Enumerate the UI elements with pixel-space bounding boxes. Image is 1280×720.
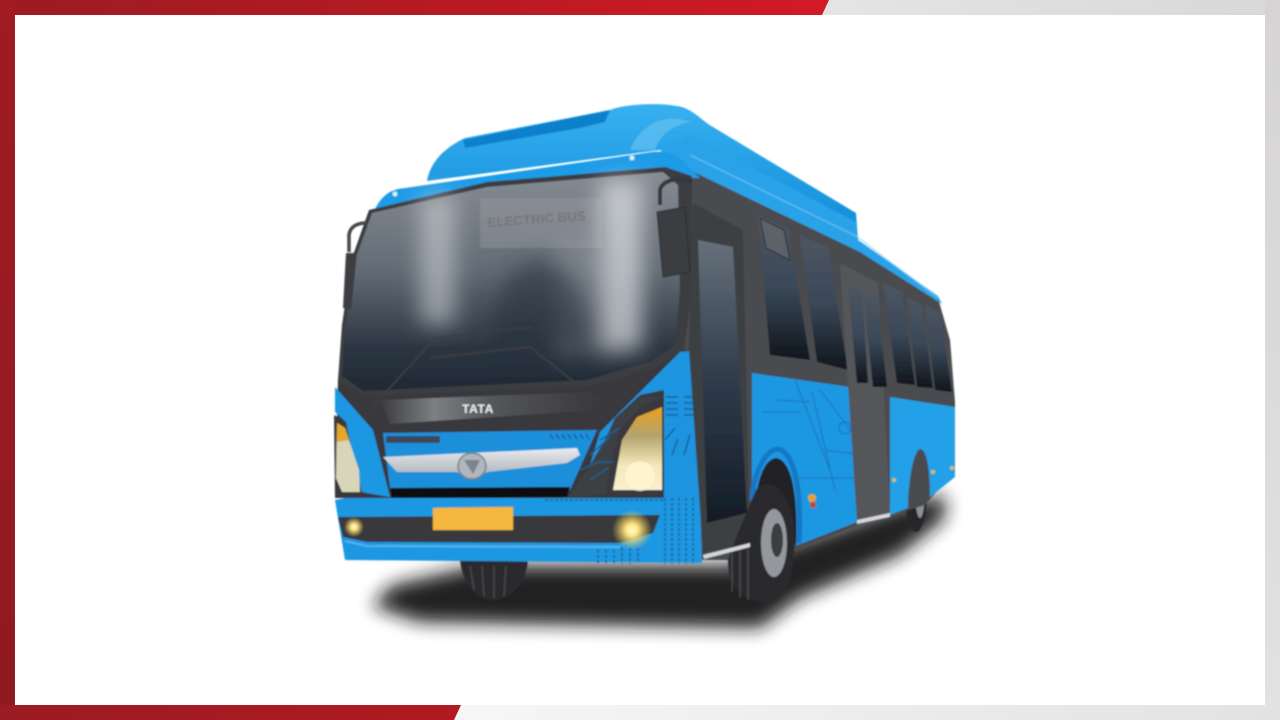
brand plate [380, 392, 598, 424]
lower bumper highlight [345, 541, 620, 547]
side vent in window [760, 218, 790, 260]
side panel front blue [752, 373, 857, 545]
left mirror [343, 223, 366, 310]
side panel rear blue [890, 397, 955, 515]
circuit graphic on front [545, 397, 698, 564]
door step [703, 543, 750, 559]
licence plate [433, 507, 513, 530]
rear door step [857, 513, 890, 524]
front right corner [590, 350, 702, 500]
destination sign text: ELECTRIC BUS [487, 208, 586, 230]
TATA logo: TATA [462, 402, 494, 416]
upper roof module [427, 104, 858, 240]
left headlight [334, 415, 390, 498]
side roof highlight [690, 155, 938, 298]
rear door glass panes [848, 285, 887, 387]
front door glass [698, 240, 747, 523]
windshield reflections [420, 180, 642, 355]
right headlight [568, 397, 663, 498]
front left corner [335, 387, 390, 497]
front door frame [689, 203, 750, 553]
grille area [383, 430, 597, 490]
rear windows [883, 283, 952, 392]
black slot [390, 487, 570, 498]
fog light right [612, 510, 652, 550]
side upper and lower dark body [680, 168, 955, 560]
front blue nose [335, 498, 702, 563]
side circuit graphic [762, 380, 855, 490]
front base dark layer [335, 350, 702, 498]
windshield surround [338, 167, 692, 396]
fog light left [344, 517, 364, 537]
chrome bar [383, 448, 580, 480]
front wheel [728, 484, 794, 602]
ground shadow [372, 495, 945, 628]
illustration: blue electric bus [334, 104, 955, 602]
side marker lamps [808, 466, 954, 508]
side window one [758, 215, 810, 360]
roof vent [463, 110, 610, 148]
roof rim lamp dots [392, 156, 634, 196]
roof highlight [630, 119, 690, 150]
rear wheel [905, 452, 927, 532]
front axle left tyre [460, 560, 528, 600]
rear door frame [840, 263, 890, 522]
side roof rim [660, 135, 942, 304]
bumper dark band [338, 515, 660, 543]
grille emblem [458, 453, 486, 479]
right mirror [657, 179, 692, 277]
front wheel arch dark [754, 458, 796, 545]
side window two [800, 235, 848, 370]
front wheel arch blue trim [752, 449, 800, 543]
front roof rim [372, 152, 700, 216]
windshield glass [342, 172, 680, 391]
wipers [368, 327, 602, 412]
